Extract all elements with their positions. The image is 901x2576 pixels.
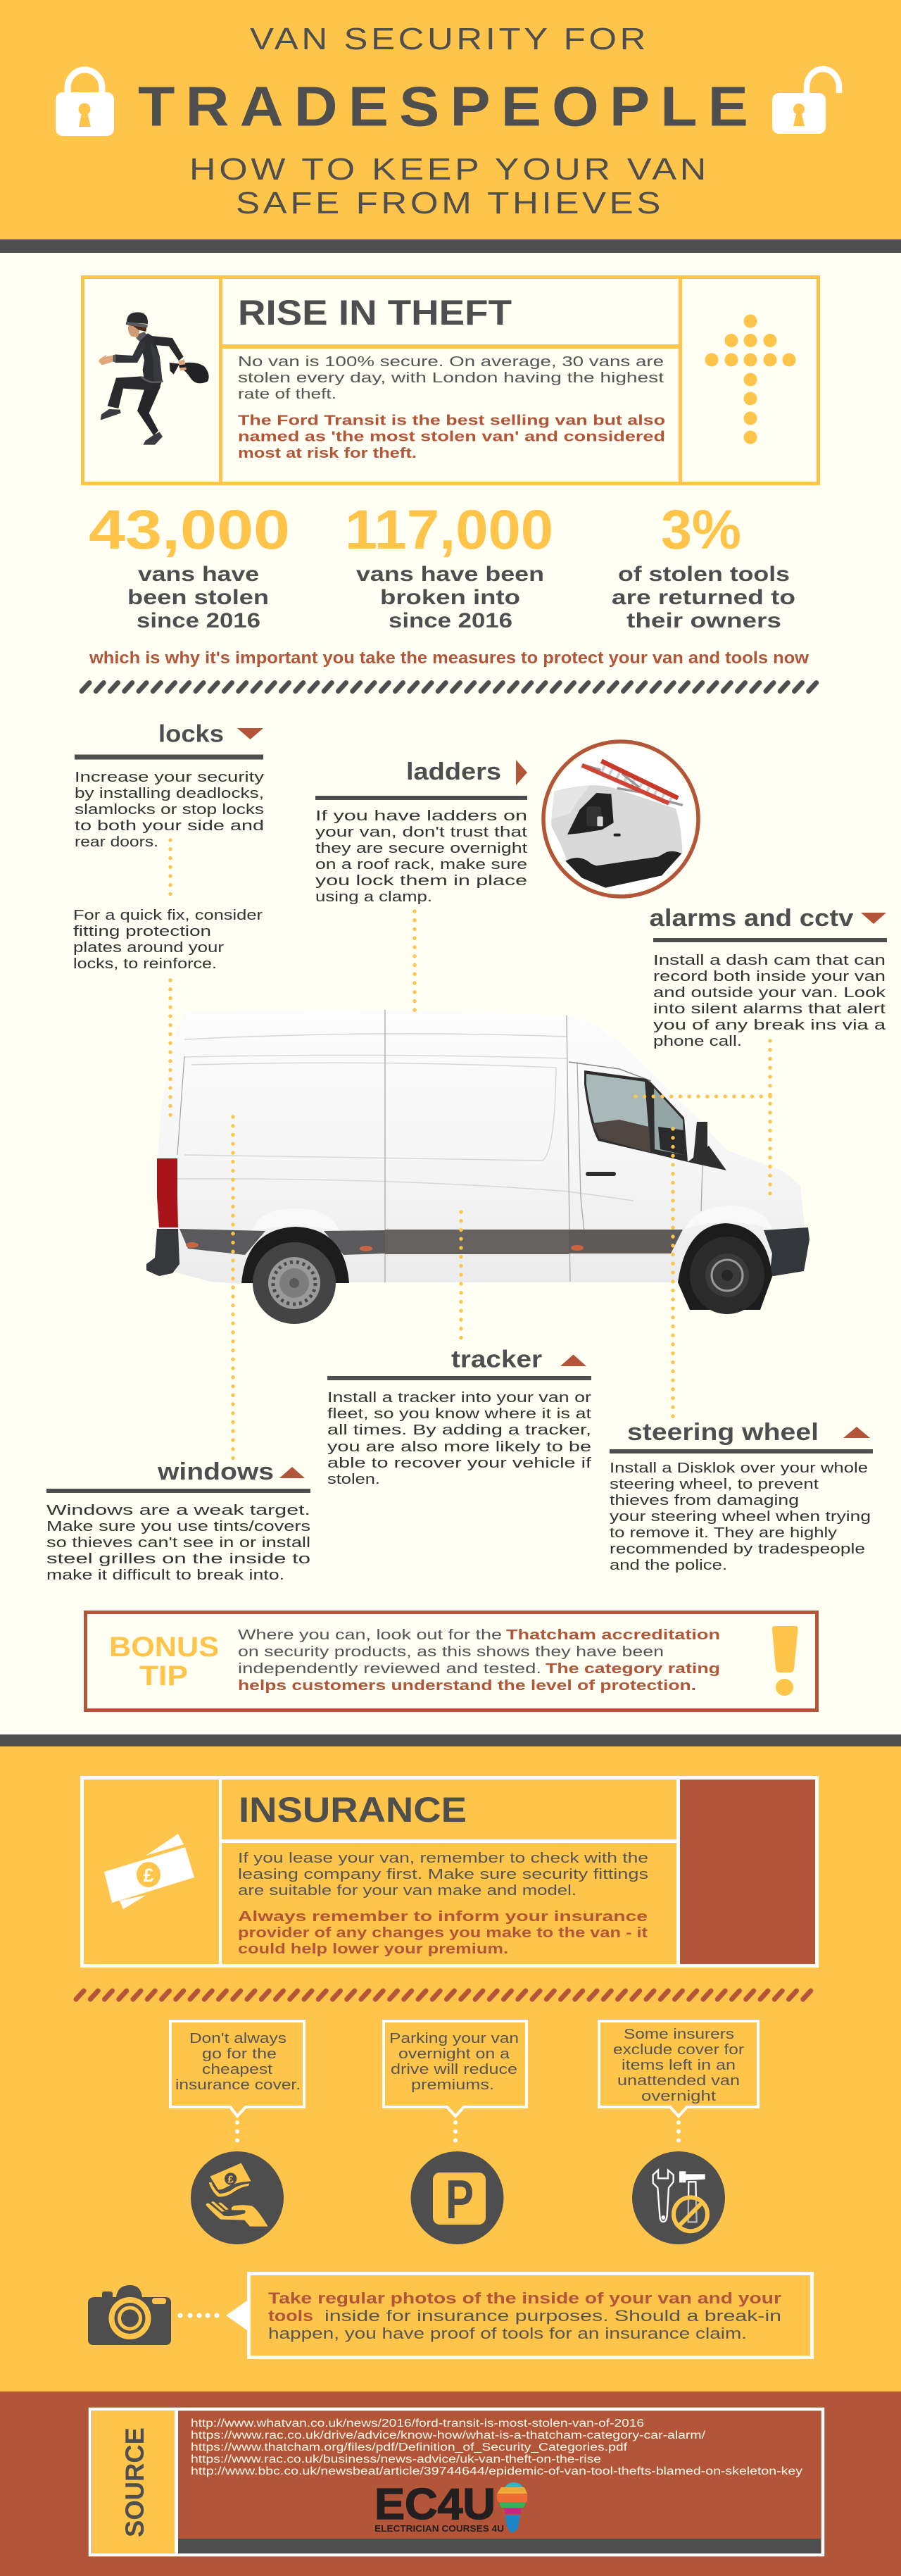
text: tracker advice: you are also more likely to be [327,1439,591,1455]
connector: alarms to windscreen [635,1094,770,1099]
text: insurer highlight: provider of any changes you make to the van - it [238,1925,648,1941]
panel: insurance [82,1777,817,1966]
text: theft paragraph: No van is 100% secure. On average, 30 vans are [238,354,664,370]
heading: rise in theft: RISE IN THEFT [238,293,512,332]
van taillight [157,1158,178,1227]
heading: bonus tip: BONUS [109,1632,219,1663]
text: tracker advice: fleet, so you know where it is at [327,1406,592,1422]
text: windows advice: steel grilles on the inside to [46,1551,310,1567]
icon: right triangle [516,760,527,785]
text: tracker advice [327,1390,592,1487]
text: windows advice: so thieves can't see in or install [46,1535,310,1551]
icon: parking sign [411,2151,504,2244]
callout: unattended tools: overnight [641,2089,717,2104]
text: steering wheel advice: to remove it. They are highly [610,1525,837,1541]
icon: exclamation mark [772,1626,798,1696]
callout: unattended tools: Some insurers [624,2027,734,2042]
text: ford transit highlight: The Ford Transit is the best selling van but also [238,413,665,428]
text: alarms advice: you of any break ins via a [653,1018,886,1033]
text: theft paragraph [238,354,664,402]
text: bonus tip body: The category rating [546,1661,720,1677]
stat: 117,000 broken into [345,498,553,632]
connector: alarms to van [768,1041,772,1197]
callout: regular photos: happen, you have proof of tools for an insurance claim. [268,2325,747,2342]
callout: cheapest cover: cheapest [202,2062,273,2077]
text: alarms advice [653,953,886,1049]
text: ladders advice [315,808,528,905]
panel: bonus tip [86,1613,817,1710]
callout: regular photos: inside for insurance purposes. Should a break-in [325,2307,781,2325]
icon: thief running with bag [99,312,209,445]
stat: 117,000 broken into: broken into [380,586,520,609]
logo: EC4U: EC4U [374,2480,496,2529]
heading: locks: locks [158,721,224,748]
stat: 3% returned: 3% [661,498,741,561]
van front wheel flare [684,1206,773,1230]
text: steering wheel advice: Install a Disklok over your whole [610,1461,868,1476]
text: source links: https://www.rac.co.uk/drive/advice/know-how/what-is-a-thatcham-category-car-alarm/ [191,2430,706,2441]
text: alarms advice: and outside your van. Look [653,985,886,1001]
text: windows advice [46,1503,310,1583]
stat: 117,000 broken into: vans have been [356,563,544,586]
heading: insurance: INSURANCE [239,1790,467,1830]
text: ford transit highlight [238,413,665,461]
icon: dotted up arrow [705,314,795,444]
stat: 3% returned: of stolen tools [618,563,790,586]
van mirror [688,1122,726,1170]
text: steering wheel advice: recommended by tradespeople [610,1542,865,1557]
text: ford transit highlight: most at risk for theft. [238,446,417,461]
heading: bonus tip [109,1632,219,1692]
text: windows advice: Windows are a weak target. [46,1503,310,1518]
text: tracker advice: all times. By adding a tracker, [327,1423,591,1438]
callout: regular photos: tools [268,2307,313,2325]
insurance section background [0,1734,901,2391]
text: steering wheel advice [610,1461,871,1573]
icon: tools prohibited [632,2151,725,2244]
heading: steering wheel: steering wheel [627,1419,819,1446]
text: source links: https://www.rac.co.uk/business/news-advice/uk-van-theft-on-the-rise [191,2453,601,2465]
text: alarms advice: record both inside your van [653,969,886,984]
panel: rise in theft [83,277,818,483]
subtitle: HOW TO KEEP YOUR VAN [189,152,710,187]
icon: banknote [104,1834,194,1909]
text: ladders advice: using a clamp. [315,889,432,905]
panel: source [90,2409,823,2555]
text: bonus tip body: on security products, as this shows they have been [238,1644,664,1660]
stat: 3% returned: their owners [626,609,781,632]
text: windows advice: make it difficult to break into. [46,1568,284,1583]
callout: parking overnight: Parking your van [389,2031,519,2046]
icon: closed padlock [56,70,114,136]
callout: parking overnight [384,2021,527,2116]
text: theft paragraph: stolen every day, with London having the highest [238,370,664,386]
text: windows advice: Make sure you use tints/covers [46,1519,310,1534]
text: bonus tip body: independently reviewed and tested. [238,1661,541,1677]
callout: unattended tools: items left in an [622,2058,736,2073]
callout: parking overnight: overnight on a [398,2046,510,2062]
text: insurer highlight [238,1909,648,1957]
text: ladders advice: they are secure overnight [315,841,528,856]
text: bonus tip body: helps customers understand the level of protection. [238,1678,696,1694]
section: alarms and cctv [649,905,887,1049]
text: steering wheel advice: your steering wheel when trying [610,1509,871,1525]
text: locks advice: by installing deadlocks, [75,786,264,801]
heading: tracker: tracker [451,1346,542,1373]
callout: cheapest cover: go for the [202,2046,277,2062]
text: leasing paragraph: If you lease your van, remember to check with the [238,1851,648,1866]
icon: hand with banknote [191,2151,284,2244]
illustration: van with roof ladder in circle [543,742,698,896]
icon: down triangle [237,728,263,739]
section: tracker [327,1346,592,1487]
callout: regular photos: Take regular photos of the inside of your van and your [268,2289,782,2307]
text: insurer highlight: Always remember to inform your insurance [238,1909,648,1925]
callout: regular photos [226,2273,812,2358]
van door handle [586,1172,616,1176]
van front wheel [690,1237,764,1314]
icon: open padlock [772,69,839,134]
callout: unattended tools [599,2021,758,2116]
subtitle: SAFE FROM THIEVES [236,186,664,220]
van wheel arches [241,1227,349,1283]
block: red side panel [680,1780,815,1964]
text: ladders advice: If you have ladders on [315,808,527,824]
icon: up triangle [843,1427,870,1438]
connector: locks to van lower [168,980,172,1117]
text: source links [191,2418,802,2477]
header band [0,0,901,253]
logo: multicolour bulb [497,2482,527,2532]
callout: parking overnight: drive will reduce [391,2062,517,2077]
section: windows [46,1458,310,1583]
icon: parking sign: P [446,2168,474,2230]
text: locks quick fix: locks, to reinforce. [73,956,217,972]
text: source links: http://www.bbc.co.uk/newsbeat/article/39744644/epidemic-of-van-tool-thefts-blamed-on-skeleton-key [191,2465,802,2477]
text: alarms advice: phone call. [653,1034,742,1049]
text: ford transit highlight: named as 'the most stolen van' and considered [238,430,665,445]
text: steering wheel advice: and the police. [610,1558,727,1573]
footer background [0,2391,901,2576]
van trim band [179,1229,265,1255]
connector: tracker to van [459,1212,463,1342]
heading: source: SOURCE [120,2427,149,2537]
stat: 43,000 stolen: been stolen [127,586,269,609]
icon: down triangle [861,913,886,924]
van side markers [186,1242,584,1251]
text: leasing paragraph [238,1851,648,1899]
text: locks advice [75,770,264,850]
connector: camera to callout [177,2313,220,2318]
stat: 3% returned: are returned to [612,586,795,609]
callout: unattended tools: exclude cover for [613,2042,744,2058]
text: ladders advice: on a roof rack, make sure [315,857,527,873]
text: locks advice: rear doors. [75,834,158,850]
stat: 117,000 broken into: 117,000 [345,498,553,561]
connector: ladders to van [412,911,417,1014]
text: locks quick fix: plates around your [73,940,224,956]
title: van security for: VAN SECURITY FOR [250,22,649,56]
connector: locks to van [168,840,172,898]
callout: why it matters: which is why it's important you take the measures to protect your van and tools now [89,649,809,668]
van cab window [584,1070,688,1162]
callout: cheapest cover: Don't always [189,2031,286,2046]
connectors: callouts to icons [237,2122,679,2142]
stat: 43,000 stolen: vans have [138,563,259,586]
text: source links: http://www.whatvan.co.uk/news/2016/ford-transit-is-most-stolen-van-of-2016 [191,2418,644,2430]
icon: up triangle [560,1355,586,1366]
text: locks advice: slamlocks or stop locks [75,802,264,818]
icon: up triangle [279,1467,305,1478]
text: alarms advice: into silent alarms that alert [653,1001,886,1017]
icon: hand with banknote: £ [228,2174,234,2185]
text: tracker advice: able to recover your vehicle if [327,1456,592,1471]
text: leasing paragraph: leasing company first. Make sure security fittings [238,1867,648,1882]
illustration: white van [146,1010,809,1324]
logo: EC4U: ELECTRICIAN COURSES 4U [374,2523,504,2534]
stat: 3% returned [612,498,795,632]
heading: windows: windows [157,1458,274,1485]
text: locks quick fix: For a quick fix, consider [73,908,263,923]
text: locks advice: Increase your security [75,770,264,785]
text: locks advice: to both your side and [75,818,264,834]
callout: cheapest cover: insurance cover. [175,2077,301,2093]
text: locks quick fix: fitting protection [73,924,211,939]
callout: parking overnight: premiums. [411,2077,494,2093]
text: insurer highlight: could help lower your premium. [238,1942,508,1957]
stat: 43,000 stolen [89,498,290,632]
stat: 43,000 stolen: since 2016 [137,609,260,632]
van front bumper [764,1227,809,1277]
section: steering wheel [610,1419,873,1573]
subtitle [189,152,710,220]
title: tradespeople: TRADESPEOPLE [138,75,759,138]
section: locks [73,721,264,972]
heading: alarms and cctv: alarms and cctv [649,905,854,932]
text: bonus tip body [238,1627,720,1694]
van rear wheel flare [252,1208,339,1231]
text: steering wheel advice: thieves from damaging [610,1493,799,1508]
connector: windows to van [231,1117,235,1461]
heading: ladders: ladders [406,758,501,785]
text: locks quick fix [73,908,263,972]
text: theft paragraph: rate of theft. [238,387,336,402]
text: leasing paragraph: are suitable for your van make and model. [238,1883,576,1899]
text: steering wheel advice: steering wheel, to prevent [610,1477,819,1492]
text: source links: https://www.thatcham.org/files/pdf/Definition_of_Security_Categories.pdf [191,2441,628,2453]
logo: EC4U [374,2480,527,2534]
text: bonus tip body: Where you can, look out for the [238,1627,502,1643]
text: ladders advice: you lock them in place [315,873,527,889]
icon: banknote: £ [143,1865,154,1886]
van rear bumper [146,1229,179,1276]
connector: steering wheel to cab [671,1129,675,1418]
callout: cheapest cover [170,2021,304,2116]
heading: bonus tip: TIP [139,1661,188,1692]
text: alarms advice: Install a dash cam that can [653,953,886,968]
stat: 117,000 broken into: since 2016 [389,609,512,632]
text: tracker advice: Install a tracker into your van or [327,1390,591,1406]
stat: 43,000 stolen: 43,000 [89,498,290,561]
icon: camera [88,2285,171,2345]
callout: unattended tools: unattended van [617,2073,740,2089]
section: ladders [315,742,698,905]
text: bonus tip body: Thatcham accreditation [506,1627,720,1643]
text: tracker advice: stolen. [327,1472,380,1487]
van rear wheel [253,1242,336,1324]
text: ladders advice: your van, don't trust that [315,825,528,840]
